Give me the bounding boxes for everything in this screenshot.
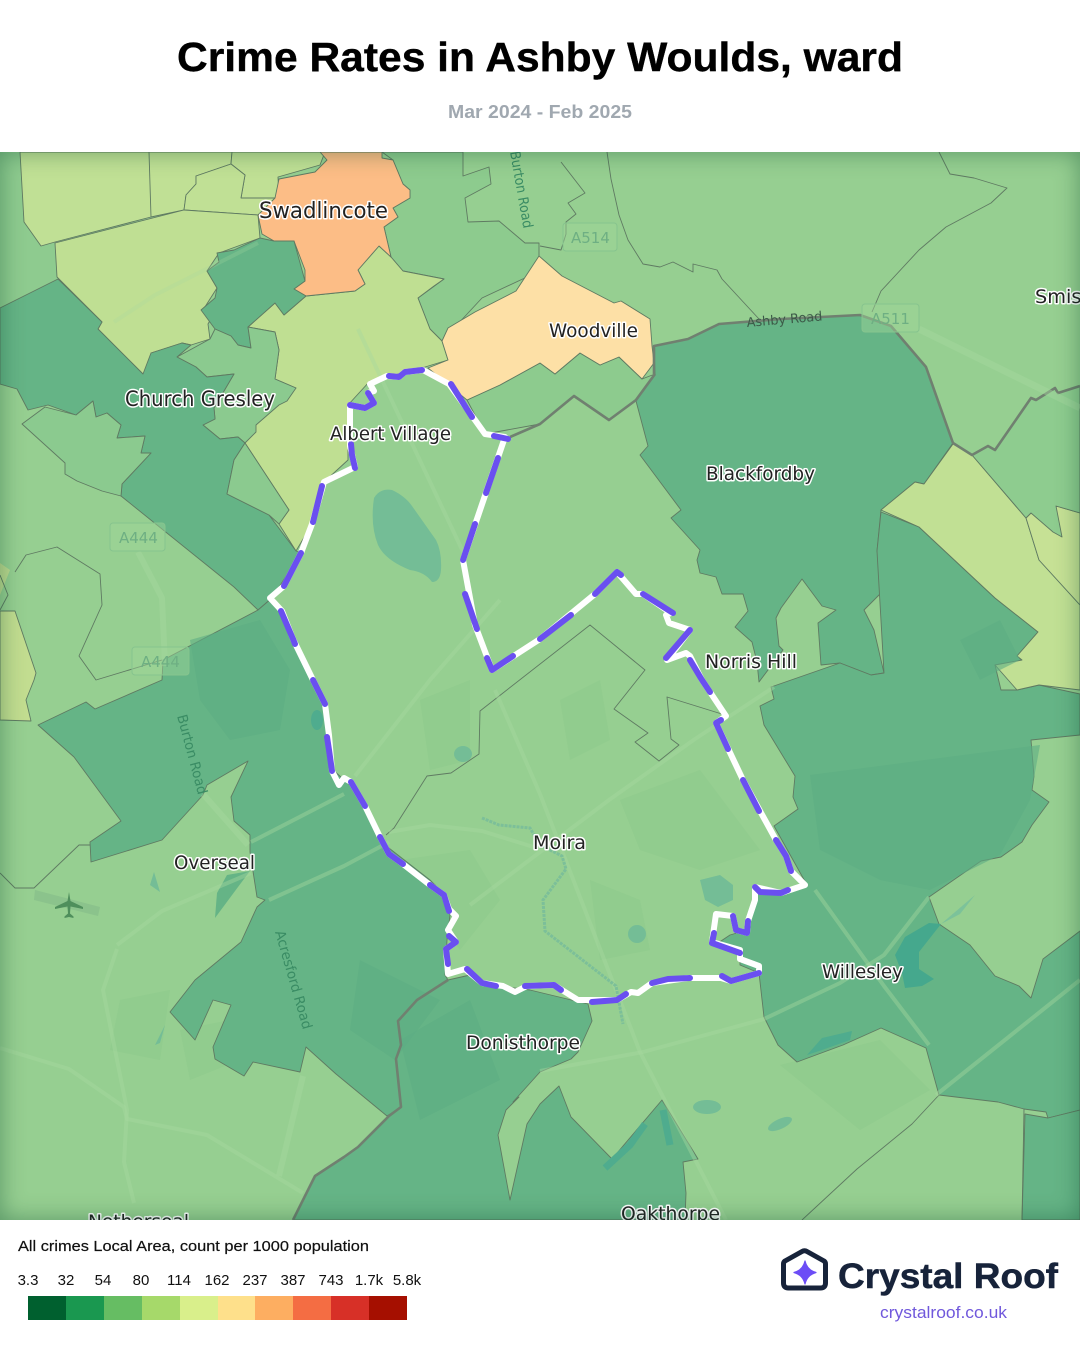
faint land patches bbox=[110, 680, 930, 1130]
place label: Norris Hill: Norris Hill bbox=[705, 651, 797, 673]
place label: Woodville: Woodville bbox=[549, 320, 638, 342]
road shield: A444 bbox=[110, 523, 165, 551]
legend labels: 114 bbox=[167, 1272, 191, 1289]
road label: Ashby Road: Ashby Road bbox=[746, 309, 823, 331]
website: crystalroof.co.uk bbox=[880, 1304, 1008, 1322]
road label: Burton Road left: Burton Road bbox=[173, 713, 210, 796]
panel: choropleth map bbox=[0, 152, 1080, 1220]
title bbox=[177, 34, 903, 122]
legend labels: 237 bbox=[242, 1272, 268, 1289]
title: Mar 2024 - Feb 2025 bbox=[448, 101, 632, 122]
legend labels: 5.8k bbox=[393, 1272, 422, 1289]
road shield: A511 bbox=[862, 304, 919, 332]
place label: Donisthorpe: Donisthorpe bbox=[466, 1032, 580, 1054]
road label: Burton Road top: Burton Road bbox=[506, 152, 535, 230]
main road boundary lines bbox=[293, 315, 1080, 1220]
legend labels: 3.3 bbox=[18, 1272, 38, 1289]
place label: Moira: Moira bbox=[533, 832, 586, 854]
icon: airport bbox=[34, 890, 100, 918]
wordmark: Crystal Roof bbox=[838, 1257, 1058, 1296]
legend labels: 743 bbox=[318, 1272, 344, 1289]
ward boundary: purple dashes bbox=[281, 370, 791, 1002]
road shield: A444 second bbox=[132, 647, 189, 675]
road shield: A444: A444 bbox=[119, 529, 158, 547]
legend labels bbox=[18, 1272, 422, 1289]
legend labels: 162 bbox=[204, 1272, 230, 1289]
river bbox=[482, 818, 623, 1024]
place label: Swadlincote: Swadlincote bbox=[259, 199, 388, 224]
roads bbox=[0, 243, 1080, 1220]
road shield: A514 bbox=[563, 223, 617, 251]
road label: Acresford Road: Acresford Road bbox=[271, 929, 315, 1031]
legend labels: 387 bbox=[280, 1272, 306, 1289]
legend labels: 80 bbox=[133, 1272, 149, 1289]
road shield: A444 second: A444 bbox=[141, 653, 180, 671]
legend labels: 54 bbox=[95, 1272, 111, 1289]
road shield: A511: A511 bbox=[871, 310, 910, 328]
title: Crime Rates in Ashby Woulds, ward bbox=[177, 34, 903, 80]
road shield: A514: A514 bbox=[571, 229, 610, 247]
legend bbox=[18, 1238, 422, 1320]
place label: Overseal: Overseal bbox=[174, 852, 255, 874]
water bodies bbox=[150, 490, 975, 1168]
legend labels: 1.7k bbox=[355, 1272, 384, 1289]
thin boundary lines bbox=[0, 152, 1024, 1220]
place label: Willesley: Willesley bbox=[822, 961, 903, 983]
legend title: All crimes Local Area, count per 1000 population bbox=[18, 1238, 369, 1255]
legend labels: 32 bbox=[58, 1272, 74, 1289]
place label: Blackfordby: Blackfordby bbox=[706, 463, 815, 485]
place label: Albert Village: Albert Village bbox=[330, 423, 451, 445]
logo: Crystal Roof bbox=[781, 1248, 1058, 1322]
place label: Church Gresley: Church Gresley bbox=[125, 387, 275, 411]
ward boundary: white line bbox=[270, 370, 805, 1000]
icon: house with star bbox=[784, 1251, 826, 1288]
darker forest patches bbox=[190, 620, 1040, 1120]
legend colour scale bbox=[28, 1296, 407, 1320]
